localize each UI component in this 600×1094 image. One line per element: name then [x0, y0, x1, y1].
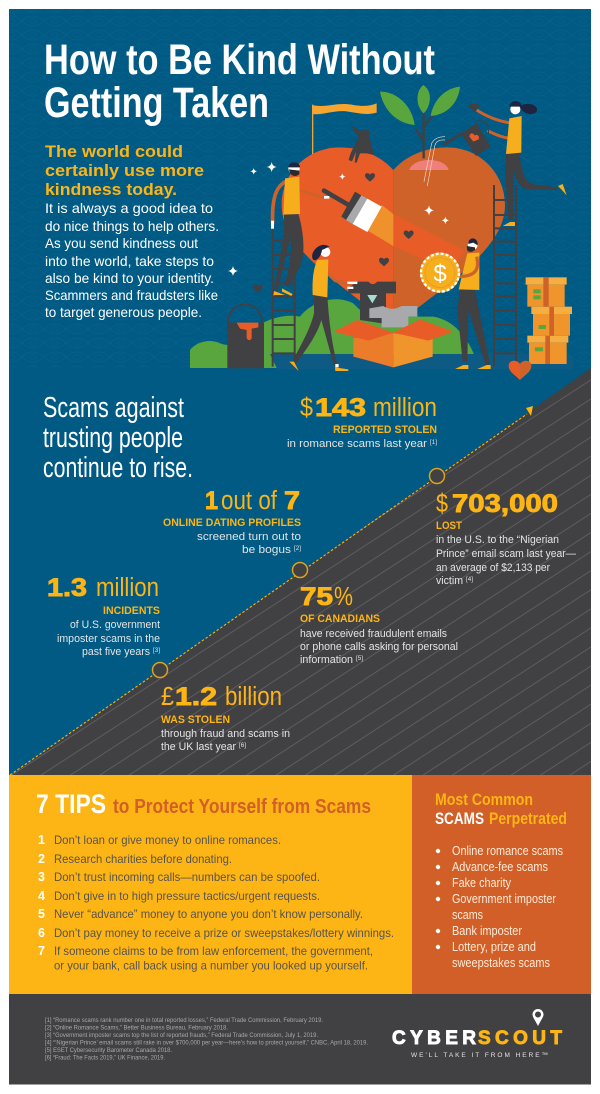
- panel: footer: [9, 994, 591, 1084]
- stat: $703,000: LOST: [436, 520, 462, 532]
- stat: $703,000: $: [436, 490, 448, 518]
- open box: [353, 333, 433, 367]
- dark diagonal area: [9, 368, 591, 776]
- stat: 1 out of 7: out of: [221, 487, 278, 515]
- section heading: continue to rise.: [43, 452, 193, 484]
- intro text: Scammers and fraudsters like: [45, 288, 218, 303]
- stat: 1 out of 7: be bogus: [242, 544, 291, 556]
- stat: 75 percent: 75: [300, 583, 333, 611]
- stat: 1.3 million: 1.3: [47, 574, 87, 602]
- person holding coin: [453, 238, 491, 369]
- title: How to Be Kind Without: [44, 36, 435, 84]
- scams heading: [435, 791, 567, 828]
- woman with watering can: [443, 101, 567, 226]
- stat: 75 percent: [300, 583, 458, 666]
- timeline markers: [152, 468, 444, 678]
- stat: 1 out of 7: [2]: [294, 545, 301, 552]
- tips list: Don’t give in to high pressure tactics/urgent requests.: [54, 890, 320, 903]
- stat: 75 percent: have received fraudulent emails: [300, 628, 447, 640]
- scams list: Online romance scams: [452, 844, 563, 858]
- stat: 75 percent: %: [334, 583, 353, 611]
- plant: [380, 85, 460, 186]
- tips list: Research charities before donating.: [54, 853, 232, 866]
- footnotes: [6] “Fraud: The Facts 2019,” UK Finance, 2019.: [45, 1054, 165, 1062]
- stat: 1 out of 7: screened turn out to: [197, 531, 301, 543]
- section heading: trusting people: [43, 422, 183, 454]
- stat: 1.2 billion: [161, 683, 290, 753]
- tips list: Don’t loan or give money to online romances.: [54, 834, 281, 847]
- scams list: scams: [452, 908, 483, 922]
- stat: 1.2 billion: £: [161, 683, 174, 711]
- stat: 1.3 million: [47, 574, 161, 658]
- woman carrying shirts: [289, 245, 357, 371]
- panel: most common scams: [412, 775, 591, 994]
- tips list: 2: [38, 852, 45, 866]
- title: Getting Taken: [44, 79, 269, 127]
- scams list: Advance-fee scams: [452, 860, 548, 874]
- flag: [312, 103, 377, 154]
- scams list: sweepstakes scams: [452, 956, 550, 970]
- stat: 1 out of 7: 7: [284, 487, 300, 515]
- stat: $143 million: [287, 394, 437, 450]
- tips heading: [36, 789, 371, 819]
- sparkles: [228, 162, 449, 276]
- icon: location pin: [532, 1009, 544, 1026]
- tips list: If someone claims to be from law enforcement, the government,: [54, 945, 373, 958]
- intro text: [45, 201, 219, 320]
- stat: $143 million: 143: [315, 394, 366, 422]
- footnotes: [1] “Romance scams rank number one in total reported losses,” Federal Trade Commission, February 2019.: [45, 1017, 323, 1024]
- subheading: [45, 143, 204, 199]
- stat: 1.2 billion: 1.2: [175, 683, 217, 711]
- stat: $143 million: million: [373, 394, 437, 422]
- trend line with arrow: [10, 406, 533, 775]
- logo: Cyberscout: [392, 1009, 562, 1059]
- tips heading: 7 TIPS: [36, 789, 106, 819]
- stat: 1.3 million: [3]: [153, 647, 160, 654]
- tips list: 7: [38, 944, 45, 958]
- stat: $703,000: [4]: [466, 576, 473, 583]
- tips list: 3: [38, 870, 45, 884]
- small dark hearts: [253, 173, 414, 293]
- logo: Cyberscout: CYBER: [392, 1028, 476, 1049]
- stat: $143 million: [1]: [430, 439, 437, 446]
- stat: 75 percent: or phone calls asking for personal: [300, 641, 458, 653]
- scams heading: Most Common: [435, 791, 533, 809]
- subheading: The world could: [45, 143, 183, 161]
- intro text: do nice things to help others.: [45, 219, 219, 234]
- tips list: Don’t pay money to receive a prize or sweepstakes/lottery winnings.: [54, 927, 394, 940]
- section heading: Scams against: [43, 392, 184, 424]
- stat: 1.2 billion: the UK last year: [161, 741, 236, 753]
- scams list: Bank imposter: [452, 924, 522, 938]
- logo: Cyberscout: WE’LL TAKE IT FROM HERE™: [411, 1052, 548, 1059]
- subheading: kindness today.: [45, 181, 177, 199]
- stat: 75 percent: information: [300, 654, 353, 666]
- tips list: or your bank, call back using a number you looked up yourself.: [54, 960, 368, 972]
- stat: $143 million: in romance scams last year: [287, 438, 427, 450]
- stat: 1.3 million: million: [96, 574, 159, 602]
- stat: 1.2 billion: billion: [225, 683, 282, 711]
- stat: $703,000: [436, 490, 577, 587]
- stat: $703,000: an average of $2,133 per: [436, 562, 550, 574]
- scams list: [436, 844, 563, 970]
- subheading: certainly use more: [45, 162, 204, 180]
- title: [44, 36, 435, 127]
- tips list: 1: [38, 833, 45, 847]
- stat: 1.3 million: imposter scams in the: [57, 633, 160, 645]
- stat: $143 million: $: [300, 394, 313, 422]
- tips list: 4: [38, 889, 45, 903]
- dark t-shirt: [348, 282, 396, 324]
- stacked boxes: [526, 277, 572, 364]
- intro text: As you send kindness out: [45, 236, 198, 251]
- dog on heart: [349, 125, 374, 163]
- tips heading: to Protect Yourself from Scams: [113, 796, 371, 818]
- tips list: Don’t trust incoming calls—numbers can be spoofed.: [54, 871, 320, 884]
- stat: 1.3 million: of U.S. government: [70, 619, 161, 631]
- footnotes: [4] “‘Nigerian Prince’ email scams still rake in over $700,000 per year—here’s how to protect yourself,” CNBC, April 18, 2019.: [45, 1040, 368, 1046]
- intro text: also be kind to your identity.: [45, 271, 214, 286]
- scams list: Government imposter: [452, 892, 556, 906]
- person on left ladder: [271, 162, 329, 296]
- gray t-shirt: [369, 306, 417, 327]
- scams list: Lottery, prize and: [452, 940, 536, 954]
- tips list: 6: [38, 926, 45, 940]
- footnotes: [3] “Government imposter scams top the list of reported frauds,” Federal Trade Commission, July 1, 2019.: [45, 1032, 318, 1039]
- ground band: [270, 354, 574, 369]
- panel: 7 tips: [9, 775, 412, 994]
- illustration: heart with volunteers: [190, 85, 574, 380]
- green hills: [190, 299, 474, 368]
- left ladder: [273, 230, 295, 367]
- stat: $143 million: REPORTED STOLEN: [333, 424, 437, 436]
- intro text: It is always a good idea to: [45, 201, 213, 216]
- right ladder: [494, 185, 516, 367]
- stat: 1.2 billion: WAS STOLEN: [161, 714, 230, 726]
- stat: 1.3 million: past five years: [82, 646, 150, 658]
- heart: [282, 147, 505, 327]
- box flaps: [333, 319, 453, 341]
- stat: $703,000: in the U.S. to the “Nigerian: [436, 534, 559, 546]
- intro text: to target generous people.: [45, 305, 202, 320]
- stat: 1.2 billion: through fraud and scams in: [161, 728, 290, 740]
- stat: $703,000: 703,000: [452, 490, 558, 518]
- logo: Cyberscout: SCOUT: [478, 1028, 562, 1049]
- paint brush: [324, 191, 393, 246]
- stat: $703,000: victim: [436, 575, 463, 587]
- footnotes: [5] ESET Cybersecurity Barometer Canada 2018.: [45, 1047, 172, 1054]
- stat: $703,000: Prince” email scam last year—: [436, 548, 577, 560]
- stat: 1 out of 7: 1: [205, 487, 218, 515]
- tips list: Never “advance” money to anyone you don’t know personally.: [54, 908, 363, 921]
- scams heading: Perpetrated: [489, 810, 567, 828]
- stat: 1 out of 7: ONLINE DATING PROFILES: [163, 517, 301, 529]
- paint can: [227, 304, 264, 368]
- panel: statistics blue background: [9, 367, 591, 776]
- section heading: [43, 392, 193, 484]
- stat: 1 out of 7: [163, 487, 301, 556]
- stat: 1.2 billion: [6]: [239, 742, 246, 749]
- tips list: [38, 833, 394, 972]
- gold coin: [420, 253, 460, 293]
- stat: 75 percent: [5]: [356, 655, 363, 662]
- panel: top blue header background: [9, 9, 591, 367]
- stat: 1.3 million: INCIDENTS: [103, 605, 160, 617]
- scams heading: SCAMS: [435, 810, 484, 828]
- intro text: into the world, take steps to: [45, 254, 214, 269]
- small orange heart: [509, 361, 531, 380]
- footnotes: [45, 1017, 368, 1062]
- footnotes: [2] “Online Romance Scams,” Better Business Bureau, February 2018.: [45, 1024, 228, 1032]
- tips list: 5: [38, 907, 45, 921]
- scams list: Fake charity: [452, 876, 512, 890]
- stat: 75 percent: OF CANADIANS: [300, 613, 380, 625]
- gold coin: $: [433, 260, 447, 287]
